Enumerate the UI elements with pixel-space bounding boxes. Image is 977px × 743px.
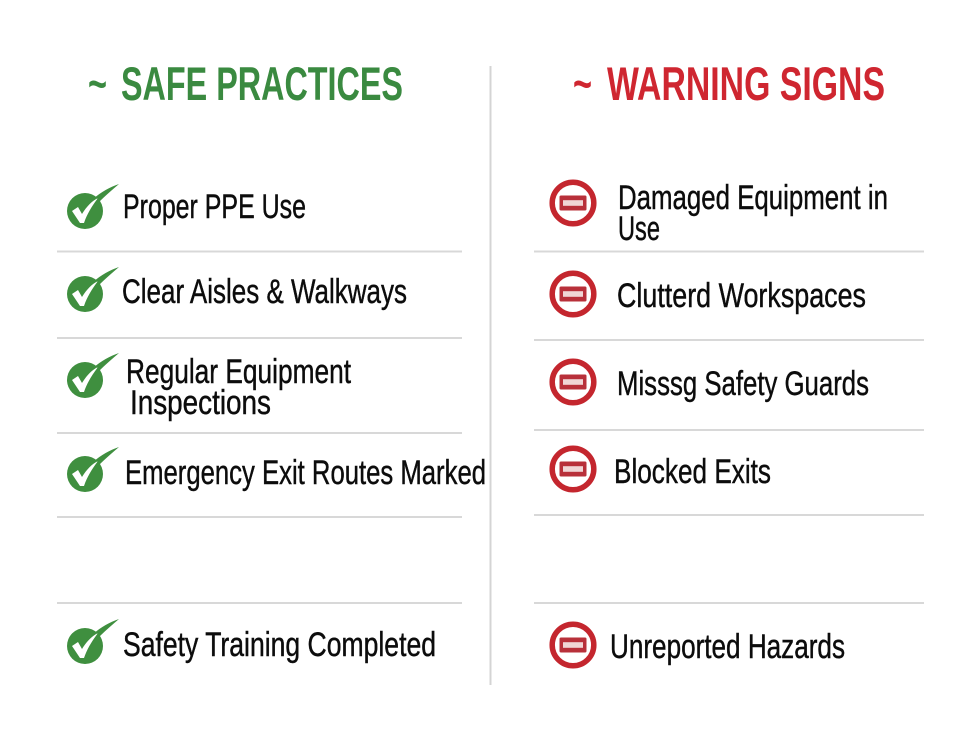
item: blocked exits: Blocked Exits — [614, 453, 771, 491]
icon: green check — [67, 447, 119, 492]
item: unreported hazards: Unreported Hazards — [610, 628, 845, 666]
icon: red no-entry — [552, 624, 594, 666]
item: proper PPE use — [67, 184, 306, 229]
item: proper PPE use: Proper PPE Use — [123, 188, 306, 226]
heading: warning signs: ~ — [573, 57, 592, 110]
item: unreported hazards — [552, 624, 845, 666]
item: damaged equipment: Damaged Equipment in — [618, 179, 888, 217]
item: blocked exits — [552, 448, 771, 491]
item: cluttered workspaces: Clutterd Workspaces — [617, 277, 866, 315]
icon: green check — [67, 267, 119, 312]
item: regular inspections: Inspections — [130, 384, 271, 422]
item: clear aisles: Clear Aisles & Walkways — [122, 273, 407, 311]
item: cluttered workspaces — [552, 273, 866, 315]
item: missing safety guards: Misssg Safety Guards — [617, 365, 869, 403]
icon: red no-entry — [552, 182, 594, 224]
icon: green check — [67, 619, 119, 664]
heading: safe practices — [88, 57, 403, 110]
panel: warning signs — [552, 57, 888, 666]
item: safety training — [67, 619, 436, 664]
item: safety training: Safety Training Completed — [123, 626, 436, 664]
icon: red no-entry — [552, 448, 594, 490]
item: damaged equipment — [552, 179, 888, 248]
heading: warning signs — [573, 57, 885, 110]
heading: safe practices: ~ — [88, 57, 107, 110]
icon: red no-entry — [552, 361, 594, 403]
item: regular inspections — [67, 353, 351, 422]
item: clear aisles — [67, 267, 407, 312]
icon: red no-entry — [552, 273, 594, 315]
panel: safe practices — [67, 57, 486, 664]
icon: green check — [67, 353, 119, 398]
item: damaged equipment: Use — [618, 210, 660, 248]
item: emergency exit routes — [67, 447, 486, 492]
heading: safe practices: SAFE PRACTICES — [121, 57, 403, 110]
item: missing safety guards — [552, 361, 869, 403]
item: regular inspections: Regular Equipment — [126, 353, 351, 391]
icon: green check — [67, 184, 119, 229]
item: emergency exit routes: Emergency Exit Routes Marked — [125, 454, 486, 492]
